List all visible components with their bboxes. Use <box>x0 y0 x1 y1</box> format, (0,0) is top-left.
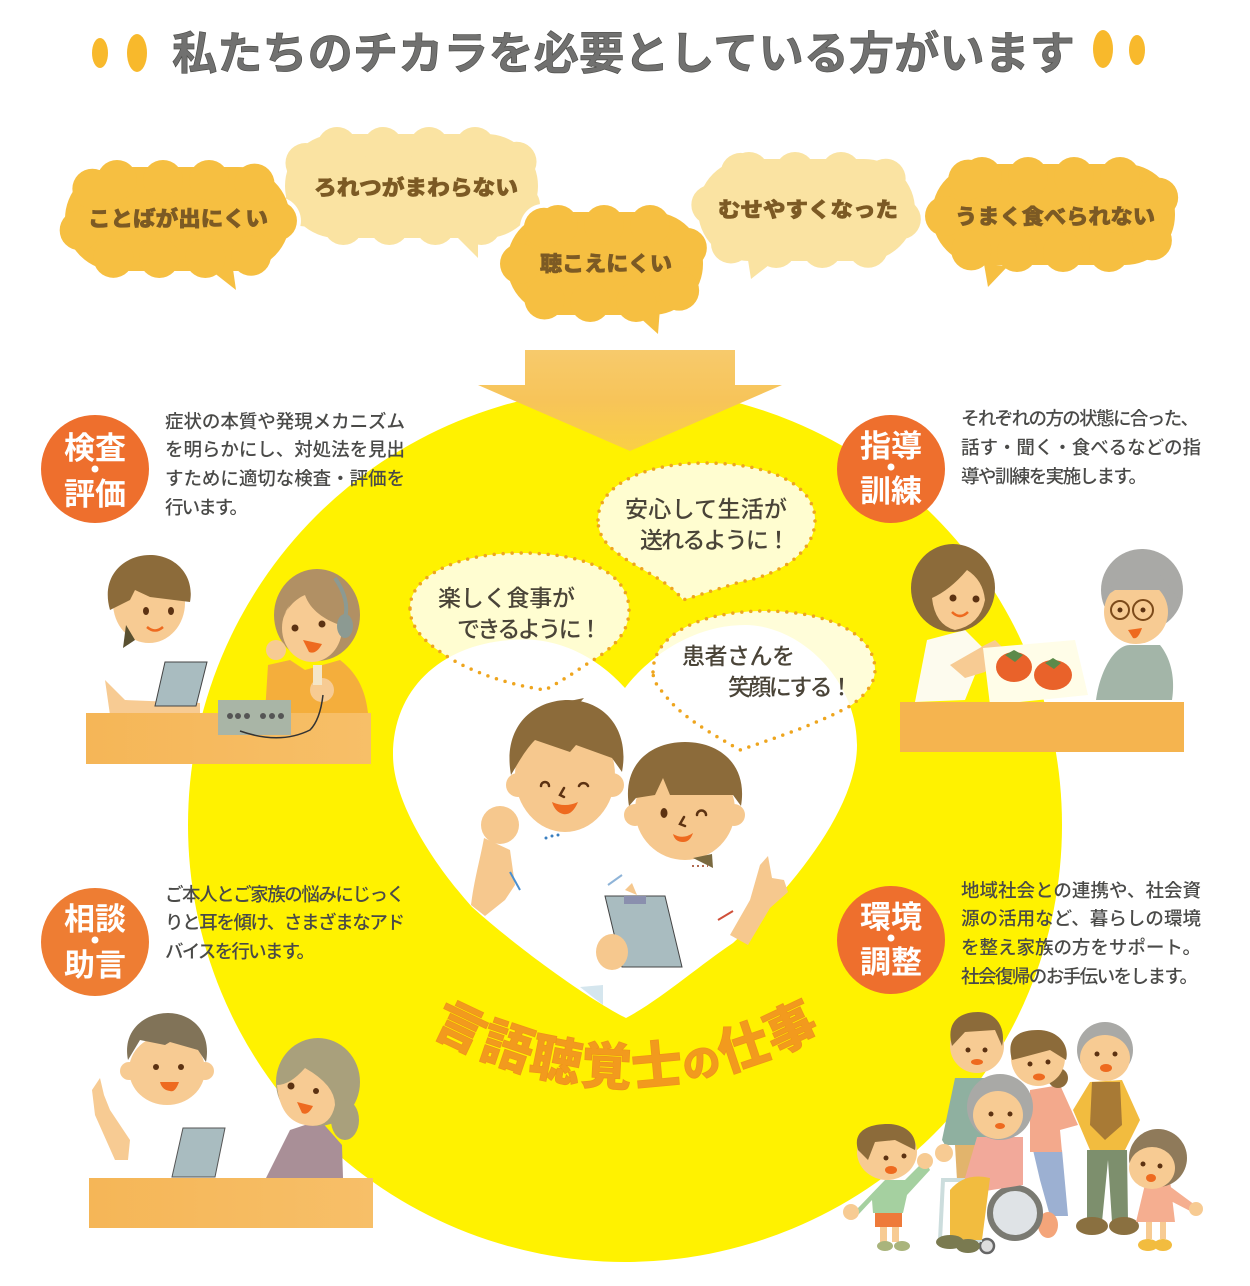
text block: バイスを行います。 <box>165 941 315 962</box>
text block: ご本人とご家族の悩みにじっく <box>165 884 405 905</box>
panel: 検査・評価 <box>41 411 405 764</box>
father <box>935 1012 1004 1180</box>
arc title: 言語聴覚士の仕事 <box>436 998 816 1090</box>
bubble: 安心して生活が: 送れるように！ <box>640 527 790 553</box>
text block <box>961 880 1201 987</box>
device <box>218 695 323 738</box>
patient with headset <box>265 569 368 713</box>
title <box>92 28 1145 79</box>
therapist <box>911 544 1005 702</box>
badge: 相談 <box>64 902 126 937</box>
text block <box>165 411 405 518</box>
arrow <box>478 350 782 451</box>
text block: 導や訓練を実施します。 <box>961 466 1147 487</box>
desk <box>86 713 371 764</box>
badge: 検査 <box>64 431 126 466</box>
cloud: ろれつがまわらない: ろれつがまわらない <box>314 176 518 200</box>
text block: それぞれの方の状態に合った、 <box>961 408 1199 429</box>
cloud: ろれつがまわらない <box>298 147 525 258</box>
panel: 指導・訓練 <box>837 408 1201 752</box>
callout bubbles <box>410 463 875 750</box>
card with tomatoes <box>983 640 1088 705</box>
girl <box>1129 1129 1203 1251</box>
text block: 源の活用など、暮らしの環境 <box>961 908 1201 929</box>
text block: 話す・聞く・食べるなどの指 <box>961 437 1201 458</box>
lower uniform <box>580 985 603 1005</box>
uniform accents <box>510 866 733 920</box>
bubble: 患者さんを: 笑顔にする！ <box>728 674 853 700</box>
family illustration <box>843 1012 1203 1253</box>
panel: 環境調整 <box>837 880 1203 1253</box>
cloud: ことばが出にくい <box>78 180 277 290</box>
left face <box>506 698 624 832</box>
bubble: 楽しく食事が: 楽しく食事が <box>438 585 575 611</box>
badge: 調整 <box>860 945 922 980</box>
badge <box>41 415 149 523</box>
hands <box>596 856 788 970</box>
central illustration: two therapists <box>471 698 788 1005</box>
text block: すために適切な検査・評価を <box>165 468 405 489</box>
badge: 指導 <box>860 429 922 464</box>
text block <box>165 884 405 962</box>
wheelchair and grandmother <box>936 1074 1040 1253</box>
left therapist arm <box>471 838 515 916</box>
text block: 社会復帰のお手伝いをします。 <box>961 966 1198 987</box>
badge: 訓練 <box>860 474 922 509</box>
panel: 相談・助言 <box>41 884 405 1228</box>
yellow circle <box>188 388 1062 1262</box>
bubble: 患者さんを <box>653 611 875 750</box>
cloud: 聴こえにくい <box>520 225 690 334</box>
icon: right dots <box>1093 30 1145 68</box>
bubble: 安心して生活が: 安心して生活が <box>625 496 787 522</box>
text block: を整え家族の方をサポート。 <box>961 937 1201 958</box>
badge <box>837 415 945 523</box>
icon: left dots <box>92 34 147 72</box>
text block: 地域社会との連携や、社会資 <box>961 880 1201 901</box>
mother <box>1010 1030 1078 1238</box>
cloud: うまく食べられない <box>945 177 1162 287</box>
bubble: 患者さんを: 患者さんを <box>682 643 795 669</box>
elderly man <box>1096 549 1183 700</box>
clipboard <box>605 896 682 967</box>
badge: 環境 <box>860 900 922 935</box>
badge: 助言 <box>64 948 126 983</box>
desk <box>900 702 1184 752</box>
badge <box>41 888 149 996</box>
white heart <box>393 625 857 1018</box>
bubble: 楽しく食事が: できるように！ <box>457 616 602 642</box>
therapist <box>105 555 207 715</box>
boy <box>843 1124 933 1251</box>
cloud: むせやすくなった <box>711 172 902 279</box>
title text: 私たちのチカラを必要としている方がいます <box>172 28 1075 79</box>
desk <box>89 1178 373 1228</box>
elderly woman <box>266 1038 360 1178</box>
collar dots <box>544 834 560 840</box>
cloud: うまく食べられない: うまく食べられない <box>955 205 1155 229</box>
text block <box>961 408 1201 487</box>
grandfather <box>1073 1022 1140 1235</box>
text block: 症状の本質や発現メカニズム <box>165 411 405 432</box>
cloud: むせやすくなった: むせやすくなった <box>718 199 898 222</box>
bubble: 安心して生活が <box>598 463 815 600</box>
left fist <box>481 806 519 844</box>
text block: 行います。 <box>165 497 248 518</box>
text block: を明らかにし、対処法を見出 <box>165 439 405 460</box>
bubble: 楽しく食事が <box>410 553 629 690</box>
therapist <box>92 1013 225 1178</box>
badge <box>837 886 945 994</box>
badge: 評価 <box>64 477 126 512</box>
right face <box>624 742 745 868</box>
text block: りと耳を傾け、さまざまなアド <box>165 912 405 933</box>
speech clouds <box>78 147 1162 334</box>
cloud: ことばが出にくい: ことばが出にくい <box>88 207 268 231</box>
cloud: 聴こえにくい: 聴こえにくい <box>540 253 672 276</box>
